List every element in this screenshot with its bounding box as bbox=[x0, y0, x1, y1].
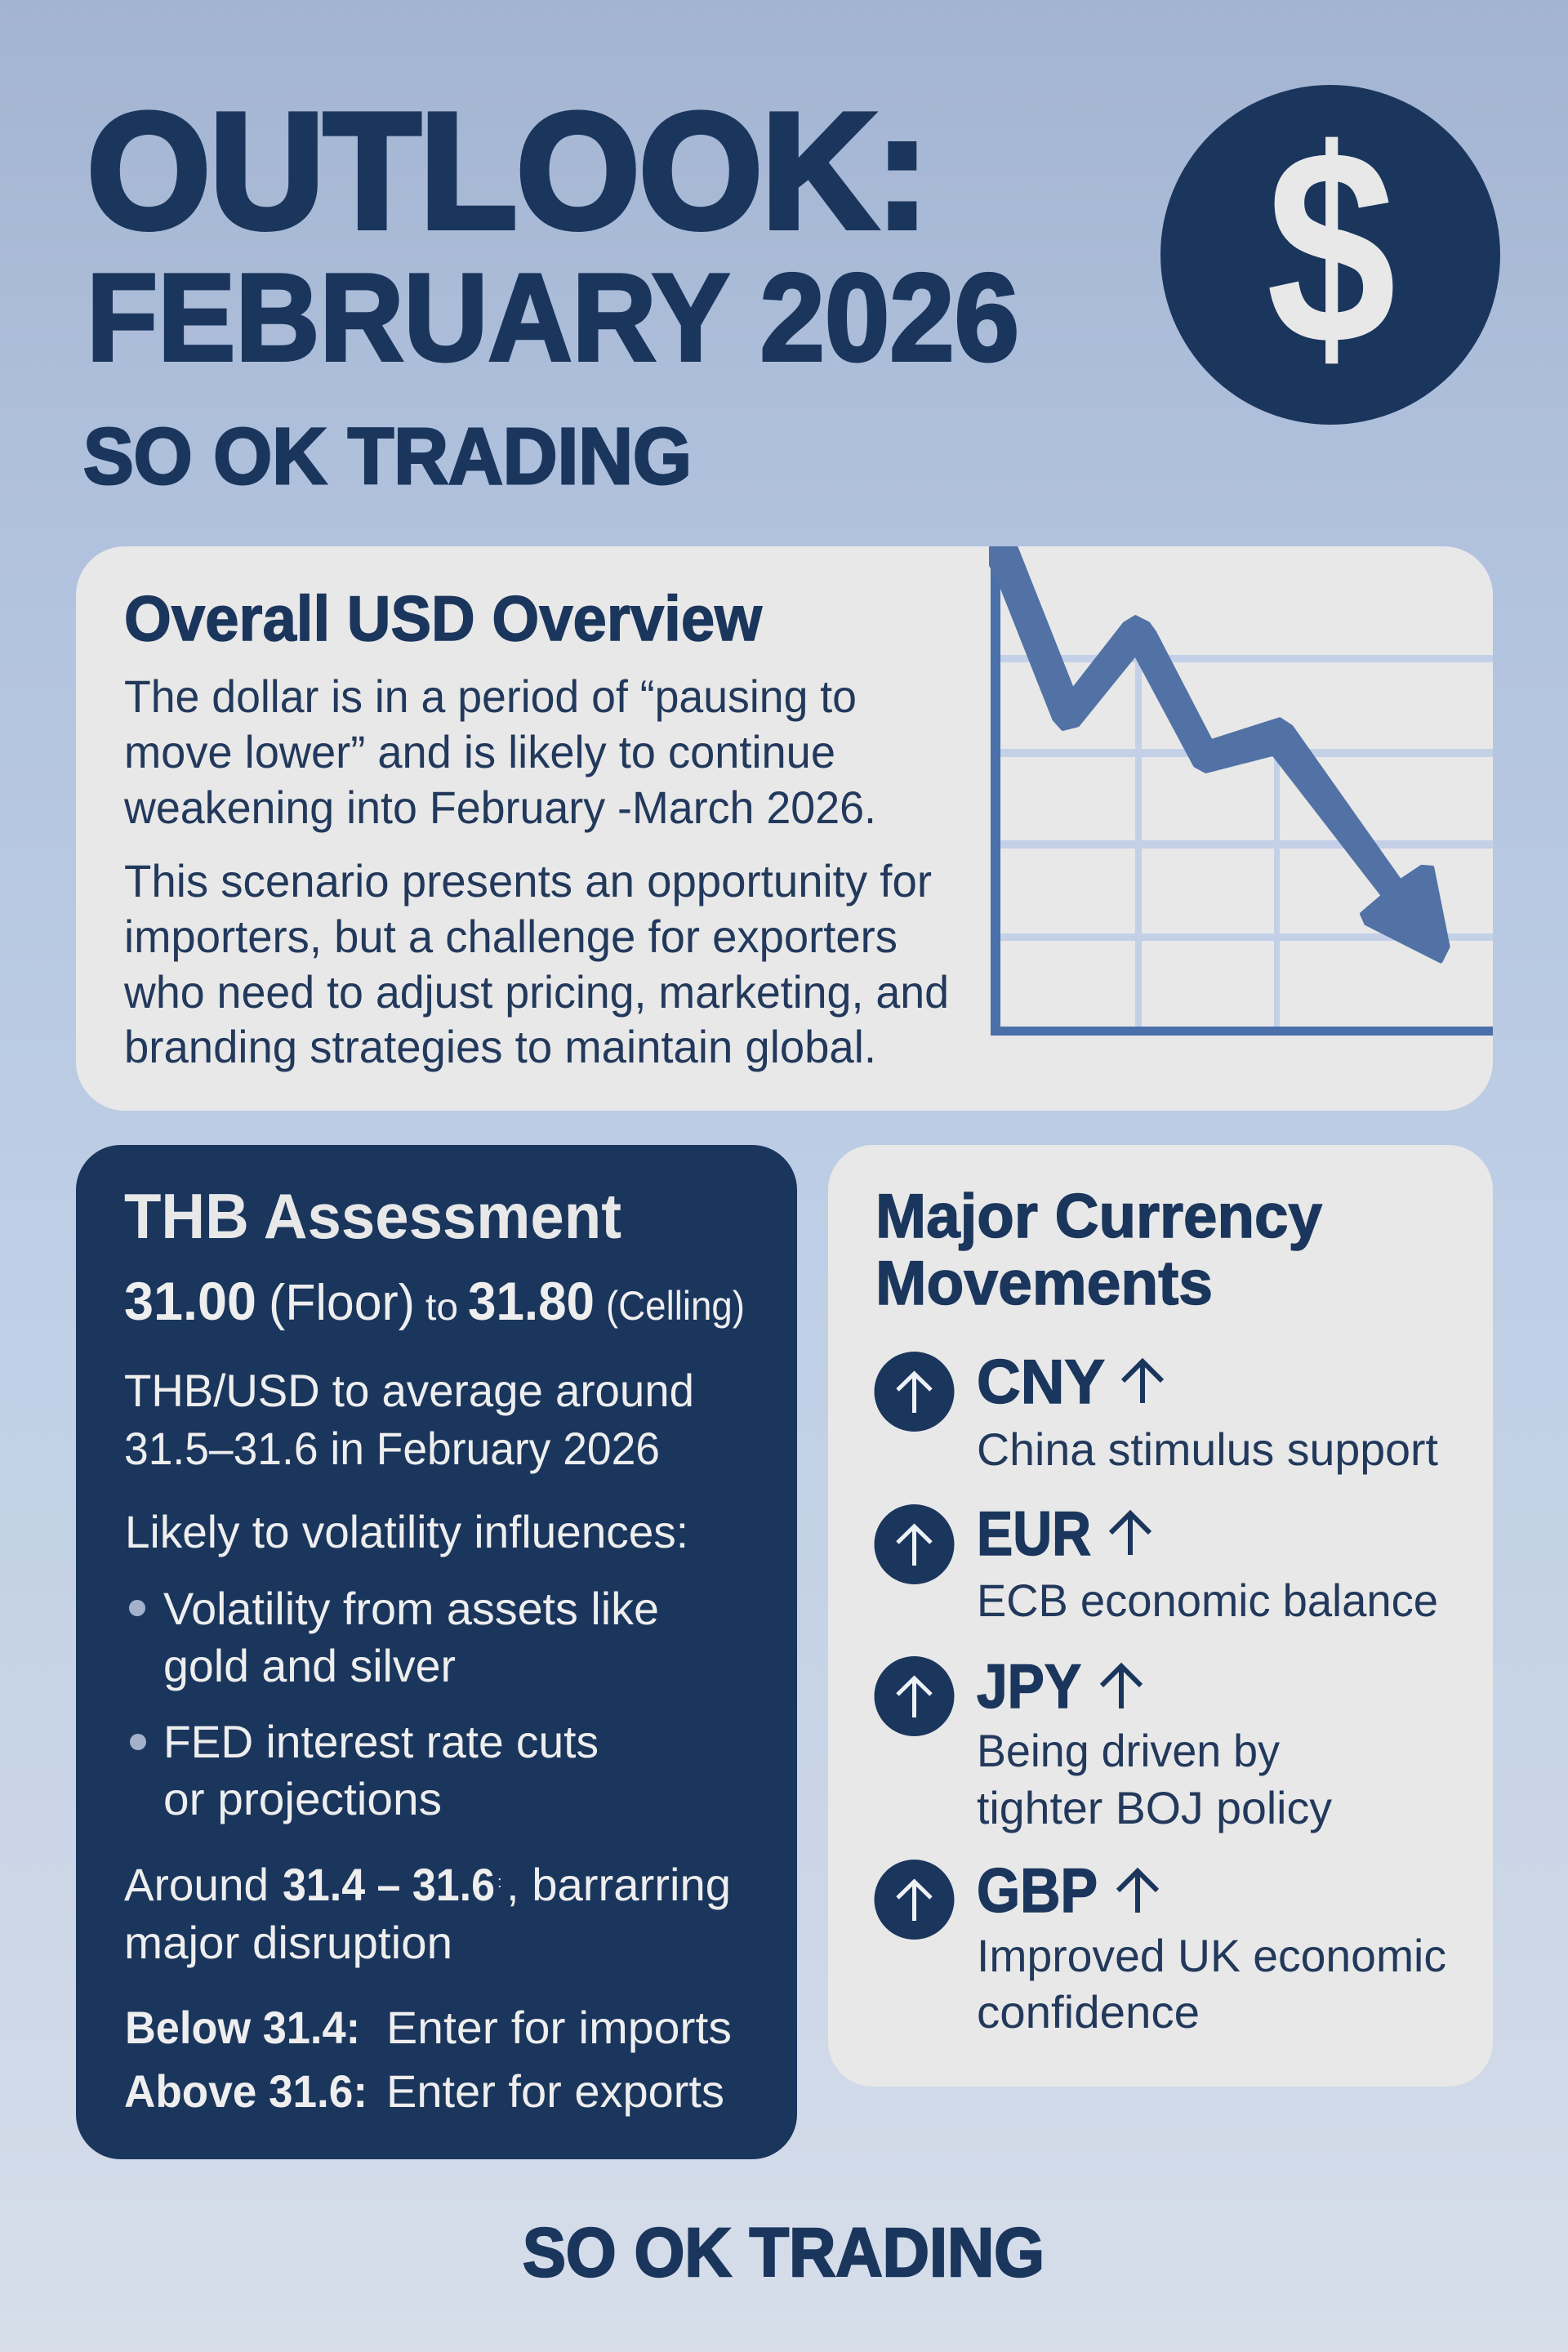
arrow: downward trend bbox=[991, 547, 1448, 961]
text block: importer and exporter impact: branding strategies to maintain global. bbox=[124, 1021, 876, 1072]
item: EUR: EUR bbox=[977, 1499, 1091, 1569]
range: floor to ceiling: 31.80 bbox=[468, 1271, 595, 1331]
text block: entry levels: Enter for imports bbox=[386, 2002, 732, 2053]
text block: expected range bbox=[124, 1859, 731, 1968]
item: CNY bbox=[874, 1348, 1438, 1475]
item: GBP: GBP bbox=[977, 1856, 1098, 1926]
item: CNY: China stimulus support bbox=[977, 1423, 1438, 1475]
subtitle: So OK Trading: SO OK TRADING bbox=[83, 412, 692, 501]
range: floor to ceiling: (Floor) bbox=[269, 1275, 415, 1331]
header title block bbox=[83, 80, 1019, 501]
range: floor to ceiling: 31.00 bbox=[124, 1271, 256, 1331]
text block: entry levels: Above 31.6: bbox=[124, 2065, 368, 2117]
panel: THB assessment bbox=[76, 1145, 797, 2159]
heading: Overall USD Overview: Overall USD Overview bbox=[124, 582, 762, 654]
text block: importer and exporter impact: This scenario presents an opportunity for bbox=[124, 855, 932, 906]
heading: Major Currency Movements: Major Currency bbox=[875, 1182, 1322, 1251]
text block: dollar outlook bbox=[123, 670, 876, 833]
text block: importer and exporter impact: who need to adjust pricing, marketing, and bbox=[123, 966, 949, 1018]
icon: dollar coin: $ bbox=[1267, 91, 1396, 403]
item: JPY: JPY bbox=[977, 1652, 1081, 1722]
text block: entry levels: Below 31.4: bbox=[125, 2002, 360, 2053]
text block: entry levels: Enter for exports bbox=[386, 2065, 724, 2117]
item: GBP bbox=[874, 1856, 1446, 2038]
text block: importer and exporter impact: importers, but a challenge for exporters bbox=[124, 911, 898, 962]
bullet: FED rate cuts: or projections bbox=[163, 1773, 442, 1824]
item: EUR: ECB economic balance bbox=[977, 1575, 1438, 1626]
text block: dollar outlook: weakening into February -March 2026. bbox=[123, 782, 876, 833]
text block: average forecast bbox=[124, 1365, 694, 1474]
item: JPY bbox=[874, 1652, 1332, 1833]
bullet: gold and silver bbox=[129, 1583, 659, 1691]
chart: falling dollar line bbox=[991, 546, 1493, 1036]
text block: entry levels bbox=[124, 2002, 732, 2117]
heading: THB Assessment: THB Assessment bbox=[124, 1180, 621, 1252]
item: GBP: Improved UK economic bbox=[977, 1930, 1446, 1981]
title: OUTLOOK: OUTLOOK: bbox=[87, 80, 929, 262]
item: JPY: Being driven by bbox=[977, 1725, 1280, 1776]
item: JPY: tighter BOJ policy bbox=[977, 1782, 1332, 1833]
icon: dollar coin bbox=[1160, 85, 1500, 425]
item: CNY: CNY bbox=[977, 1348, 1105, 1417]
footer: So OK Trading: SO OK TRADING bbox=[523, 2214, 1045, 2291]
text block: expected range: 31.4 – 31.6 bbox=[283, 1859, 495, 1910]
text block: average forecast: THB/USD to average around bbox=[124, 1365, 694, 1416]
text block: expected range: : bbox=[497, 1873, 502, 1891]
text block: dollar outlook: The dollar is in a period of “pausing to bbox=[124, 670, 857, 722]
panel: overall USD overview bbox=[76, 546, 1493, 1111]
heading: Major Currency Movements bbox=[875, 1182, 1322, 1318]
bullet: FED rate cuts bbox=[130, 1716, 599, 1824]
text: influences intro: Likely to volatility influences: bbox=[125, 1506, 688, 1557]
bullet: FED rate cuts: FED interest rate cuts bbox=[163, 1716, 599, 1767]
item: EUR bbox=[874, 1499, 1438, 1626]
title: February 2026: FEBRUARY 2026 bbox=[87, 248, 1019, 387]
text block: dollar outlook: move lower” and is likely to continue bbox=[124, 726, 835, 777]
text block: expected range: , barrarring bbox=[506, 1859, 731, 1910]
text block: expected range: major disruption bbox=[124, 1917, 452, 1968]
range: floor to ceiling: (Celling) bbox=[606, 1283, 745, 1329]
heading: Major Currency Movements: Movements bbox=[875, 1249, 1213, 1318]
text block: average forecast: 31.5–31.6 in February 2026 bbox=[124, 1423, 660, 1474]
bullet: gold and silver: gold and silver bbox=[163, 1640, 456, 1691]
text block: expected range: Around bbox=[124, 1859, 269, 1910]
range: floor to ceiling: to bbox=[425, 1285, 458, 1328]
bullet: gold and silver: Volatility from assets like bbox=[163, 1583, 659, 1634]
panel: major currency movements bbox=[828, 1145, 1493, 2087]
text block: importer and exporter impact bbox=[123, 855, 949, 1072]
item: GBP: confidence bbox=[977, 1986, 1200, 2038]
range: floor to ceiling bbox=[124, 1271, 745, 1331]
